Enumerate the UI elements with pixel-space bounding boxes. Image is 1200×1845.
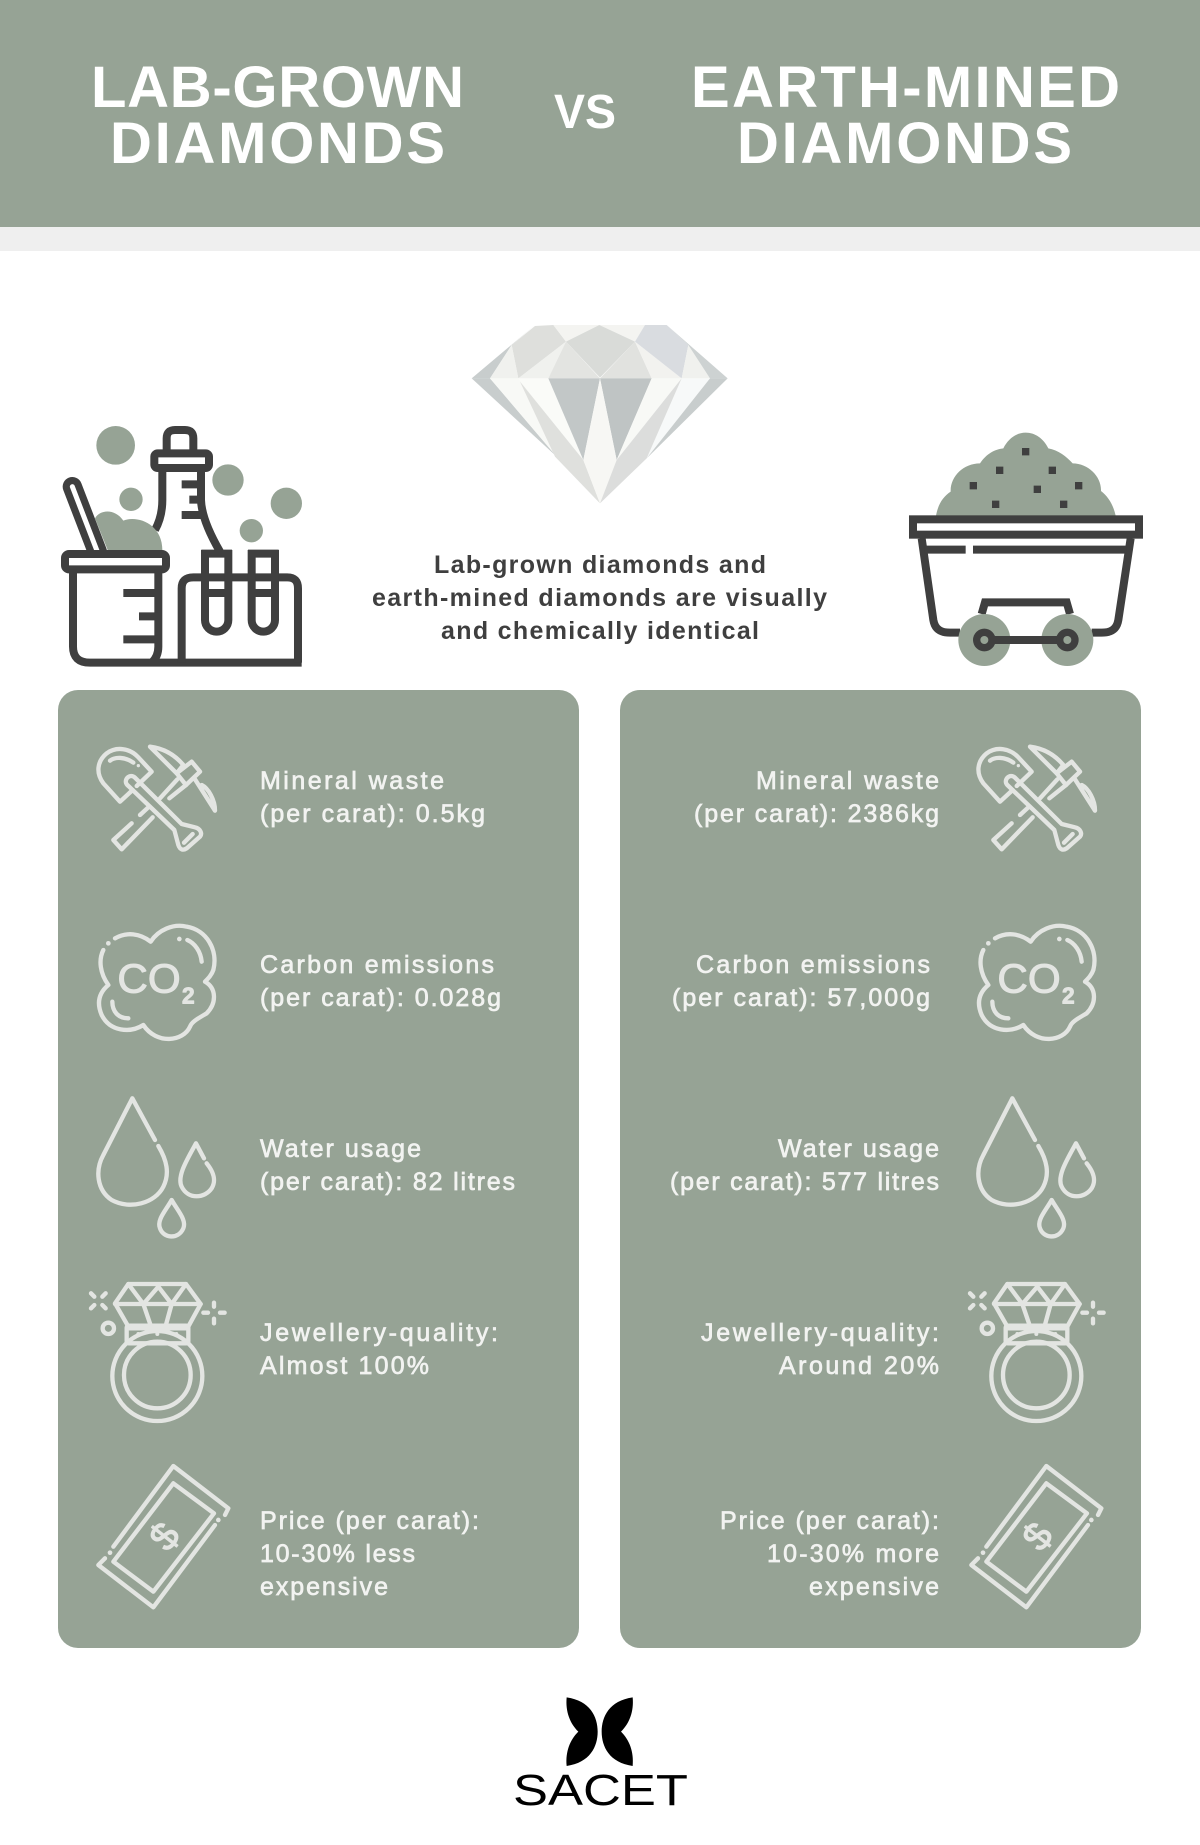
intro statement: Lab-grown diamonds and [434,551,766,579]
icon: water drops [978,1098,1094,1236]
versus label: VS [554,86,616,139]
row: price: Price (per carat): [260,1507,479,1535]
row: jewellery quality: Almost 100% [260,1352,429,1380]
row: price: expensive [809,1573,939,1601]
icon: banknote: $ [141,1514,189,1559]
header banner [0,0,1200,251]
row: water usage: Water usage [778,1135,939,1163]
intro statement: and chemically identical [441,617,759,645]
icon: water drops [98,1098,214,1236]
icon: carbon dioxide cloud [99,926,214,1039]
icon: shovel and pick [978,747,1095,850]
icon: carbon dioxide cloud: CO [117,955,181,1001]
row: price: expensive [260,1573,388,1601]
icon: diamond ring [91,1284,225,1421]
row: price: 10-30% less [260,1540,415,1568]
row: jewellery quality: Jewellery-quality: [260,1319,498,1347]
row: water usage: (per carat): 82 litres [260,1168,515,1196]
panel: earth-mined diamonds [620,690,1141,1648]
icon: banknote [98,1466,228,1607]
wordmark: SACET [513,1766,688,1815]
icon: banknote: $ [1014,1514,1062,1559]
icon: mine cart [913,433,1139,666]
intro statement: earth-mined diamonds are visually [372,584,827,612]
title: earth-mined diamonds: EARTH-MINED [691,55,1120,120]
title: lab-grown diamonds: DIAMONDS [110,111,445,176]
row: carbon emissions: (per carat): 0.028g [260,984,501,1012]
icon: carbon dioxide cloud: CO [997,955,1061,1001]
title: earth-mined diamonds: DIAMONDS [737,111,1072,176]
icon: carbon dioxide cloud: 2 [1062,982,1075,1008]
icon: diamond [472,325,728,503]
row: price: Price (per carat): [720,1507,939,1535]
row: water usage: (per carat): 577 litres [670,1168,939,1196]
row: mineral waste: (per carat): 2386kg [694,800,939,828]
row: mineral waste: Mineral waste [260,767,444,795]
row: jewellery quality: Jewellery-quality: [701,1319,939,1347]
icon: shovel and pick [98,747,215,850]
icon: banknote [971,1466,1101,1607]
row: mineral waste: (per carat): 0.5kg [260,800,485,828]
row: carbon emissions: Carbon emissions [696,951,930,979]
icon: laboratory glassware [65,426,302,663]
row: water usage: Water usage [260,1135,421,1163]
icon: butterfly mark [566,1697,633,1766]
title: lab-grown diamonds: LAB-GROWN [91,55,464,120]
icon: carbon dioxide cloud [979,926,1094,1039]
row: mineral waste: Mineral waste [756,767,939,795]
icon: carbon dioxide cloud: 2 [182,982,195,1008]
panel: lab-grown diamonds [58,690,579,1648]
row: price: 10-30% more [767,1540,939,1568]
icon: diamond ring [970,1284,1104,1421]
row: carbon emissions: Carbon emissions [260,951,494,979]
row: jewellery quality: Around 20% [779,1352,939,1380]
row: carbon emissions: (per carat): 57,000g [672,984,930,1012]
logo: sacet [513,1697,688,1815]
